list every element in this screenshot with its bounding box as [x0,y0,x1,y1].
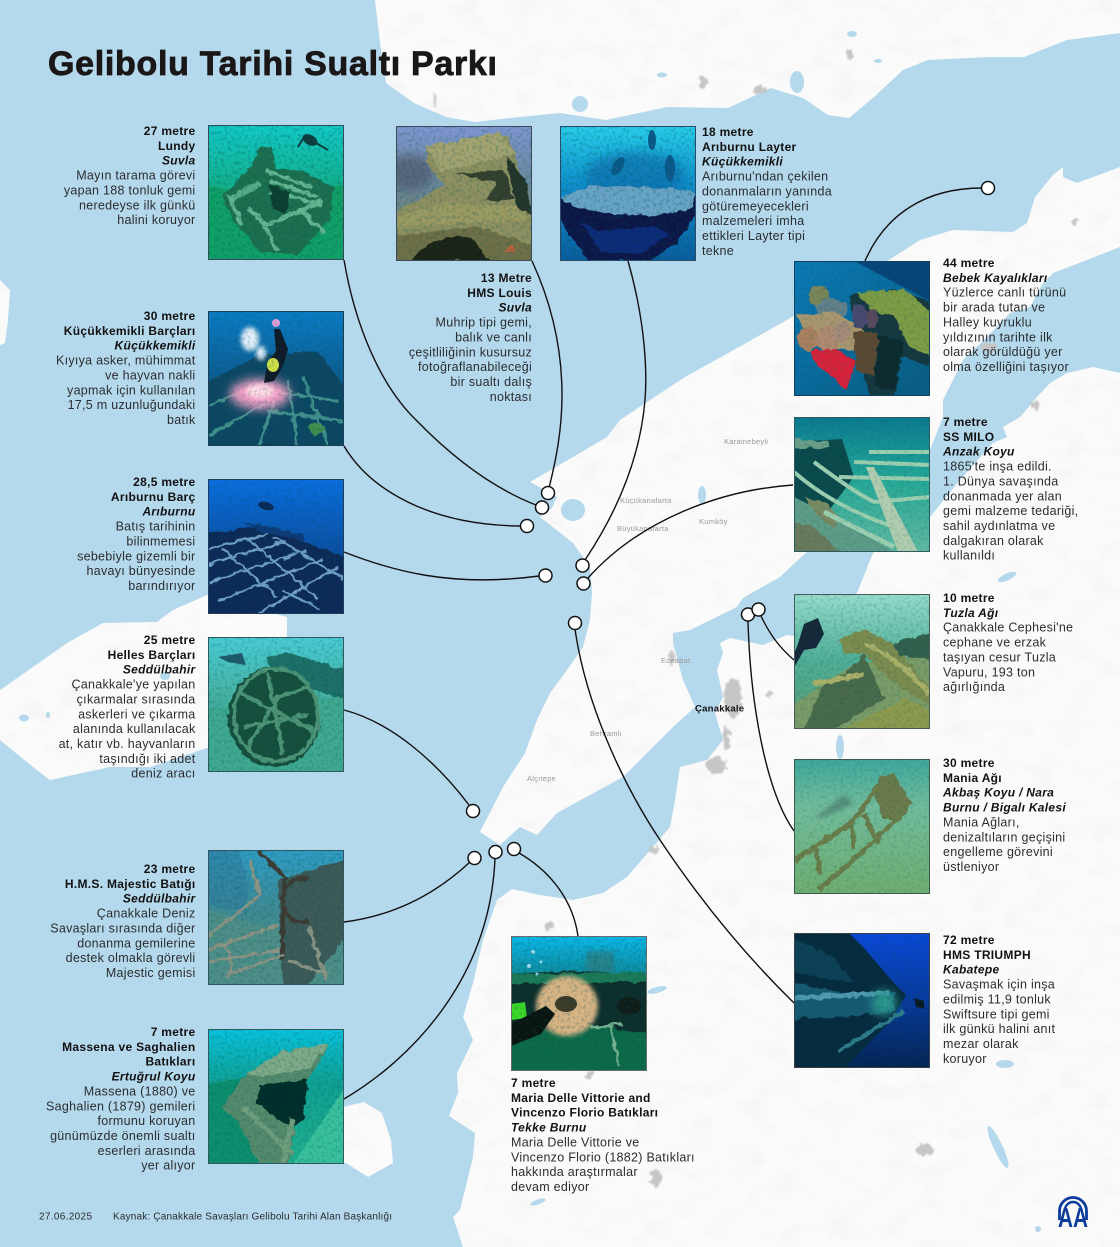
caption: Helles Barçları: 25 metre [144,633,196,647]
caption: Bebek Kayalıkları: Yüzlerce canlı türünü [943,286,1066,300]
photo: Lundy wreck [208,125,344,260]
caption: Arıburnu Barç: sebebiyle gizemli bir [77,549,196,563]
caption: Massena ve Saghalien: formunu koruyan [98,1114,196,1128]
caption: Küçükkemikli Barçları: ve hayvan nakli [105,368,196,382]
caption: Tuzla Ağı: cephane ve erzak [943,636,1047,650]
caption: Lundy: Suvla [162,154,196,168]
map place labels: Karainebeyli [724,437,768,446]
connector lines [344,188,982,1099]
caption: Helles Barçları: çıkarmalar sırasında [77,692,196,706]
caption: HMS Triumph: mezar olarak [943,1037,1019,1051]
caption: H.M.S. Majestic: Çanakkale Deniz [97,907,196,921]
caption: H.M.S. Majestic: 23 metre [144,862,196,876]
map place labels: Küçükanafarta [620,496,672,505]
caption: Mania Ağı: Burnu / Bigalı Kalesi [943,801,1066,815]
caption: Maria Delle Vittorie: hakkında araştırmalar [511,1165,638,1179]
caption: Arıburnu Barç: havayı bünyesinde [86,564,196,578]
map place labels: Kumköy [699,517,728,526]
caption: Lundy: Mayın tarama görevi [76,169,196,183]
caption: Arıburnu Layter: malzemeleri imha [702,214,804,228]
caption: Lundy: 27 metre [144,124,196,138]
location markers [466,182,994,864]
caption: Maria Delle Vittorie: Maria Delle Vittorie ve [511,1135,639,1149]
caption: Tuzla Ağı: Çanakkale Cephesi'ne [943,621,1073,635]
caption: Arıburnu Layter: Arıburnu'ndan çekilen [702,170,828,184]
footer source: Kaynak: Çanakkale Savaşları Gelibolu Tarihi Alan Başkanlığı [113,1212,392,1222]
caption: HMS Triumph: Kabatepe [943,963,999,977]
caption: HMS Triumph: ilk günkü halini anıt [943,1022,1055,1036]
caption: Lundy: Lundy [158,139,196,153]
caption: Arıburnu Layter: donanmaların yanında [702,184,832,198]
caption: SS MILO: 1. Dünya savaşında [943,474,1059,488]
caption: Küçükkemikli Barçları: Küçükkemikli Barçları [64,324,196,338]
photo: Küçükkemikli wreck [208,311,344,446]
caption: HMS Louis: fotoğraflanabileceği [418,360,532,374]
caption: Küçükkemikli Barçları: yapmak için kullanılan [67,383,196,397]
caption: HMS Triumph: Savaşmak için inşa [943,978,1055,992]
caption: Bebek Kayalıkları: 44 metre [943,256,995,270]
caption: Bebek Kayalıkları: olarak görüldüğü yer [943,345,1063,359]
caption: Mania Ağı: Mania Ağı [943,771,1002,785]
panel: Bebek Kayalıkları [794,256,1069,396]
caption: Helles Barçları: askerleri ve çıkarma [78,707,196,721]
caption: H.M.S. Majestic: H.M.S. Majestic Batığı [65,877,196,891]
caption: Tuzla Ağı: taşıyan cesur Tuzla [943,650,1056,664]
caption: HMS Louis: bir sualtı dalış [450,375,532,389]
photo: Helles wreck [208,637,344,772]
caption: Mania Ağı: 30 metre [943,756,995,770]
caption: Arıburnu Barç: 28,5 metre [133,475,196,489]
caption: HMS Louis: noktası [490,390,532,404]
caption: SS MILO: kullanıldı [943,549,995,563]
map place labels: Çanakkale [695,704,744,714]
caption: Arıburnu Layter: tekne [702,244,734,258]
footer date: 27.06.2025 [39,1212,92,1222]
caption: Tuzla Ağı: Vapuru, 193 ton [943,665,1035,679]
panel: Massena ve Saghalien [46,1025,344,1173]
caption: HMS Triumph: Swiftsure tipi gemi [943,1007,1050,1021]
caption: SS MILO: sahil aydınlatma ve [943,519,1055,533]
caption: Maria Delle Vittorie: Vincenzo Florio (1882) Batıkları [511,1150,695,1164]
caption: Küçükkemikli Barçları: Küçükkemikli [115,339,196,353]
caption: Helles Barçları: taşındığı iki adet [99,752,196,766]
caption: H.M.S. Majestic: Majestic gemisi [106,966,196,980]
panel: Arıburnu Barç [77,475,344,614]
caption: Helles Barçları: Helles Barçları [108,648,196,662]
photo: Arıburnu Layter wreck [560,126,696,261]
caption: Maria Delle Vittorie: devam ediyor [511,1180,589,1194]
photo: Majestic wreck [208,850,344,985]
caption: Arıburnu Barç: bilinmemesi [126,534,196,548]
caption: H.M.S. Majestic: Seddülbahir [123,892,197,906]
panel: SS MILO [794,415,1078,563]
panel: H.M.S. Majestic [50,850,344,985]
title: Gelibolu Tarihi Sualtı Parkı [48,45,497,83]
photo: Arıburnu Barç wreck [208,479,344,614]
panel: Lundy [64,124,344,260]
caption: Arıburnu Layter: 18 metre [702,125,754,139]
caption: HMS Louis: 13 Metre [481,271,532,285]
caption: Helles Barçları: Çanakkale'ye yapılan [71,678,196,692]
photo: SS MILO wreck [794,417,930,552]
caption: Arıburnu Layter: ettikleri Layter tipi [702,229,805,243]
caption: H.M.S. Majestic: destek olmakla görevli [66,951,196,965]
photo: Mania net [794,759,930,894]
caption: Massena ve Saghalien: Massena ve Saghalien [62,1040,196,1054]
caption: Mania Ağı: denizaltıların geçişini [943,830,1065,844]
caption: Küçükkemikli Barçları: 17,5 m uzunluğundaki [68,398,196,412]
caption: Bebek Kayalıkları: Bebek Kayalıkları [943,271,1048,285]
caption: Maria Delle Vittorie: Vincenzo Florio Batıkları [511,1106,658,1120]
panel: Arıburnu Layter [560,125,832,261]
caption: Bebek Kayalıkları: yıldızının tarihte ilk [943,330,1053,344]
caption: Mania Ağı: üstleniyor [943,860,999,874]
caption: Bebek Kayalıkları: olma özelliğini taşıyor [943,360,1069,374]
caption: HMS Louis: Muhrip tipi gemi, [436,316,532,330]
caption: HMS Louis: HMS Louis [467,286,532,300]
caption: Massena ve Saghalien: eserleri arasında [98,1144,196,1158]
caption: Küçükkemikli Barçları: batık [167,413,196,427]
caption: Tuzla Ağı: Tuzla Ağı [943,606,999,620]
panel: HMS Louis [386,126,532,404]
caption: Massena ve Saghalien: Saghalien (1879) gemileri [46,1099,196,1113]
caption: Massena ve Saghalien: Ertuğrul Koyu [112,1070,196,1084]
photo: Bebek reef [794,261,930,396]
photo: Massena wreck [208,1029,344,1164]
caption: Helles Barçları: Seddülbahir [123,663,197,677]
caption: Arıburnu Layter: Küçükkemikli [702,155,783,169]
caption: Arıburnu Barç: Arıburnu [141,505,196,519]
caption: SS MILO: gemi malzeme tedariği, [943,504,1078,518]
caption: SS MILO: dalgakıran olarak [943,534,1044,548]
caption: Tuzla Ağı: 10 metre [943,591,995,605]
panel: HMS Triumph [794,933,1055,1068]
photo: HMS Triumph wreck [794,933,930,1068]
caption: Mania Ağı: Akbaş Koyu / Nara [942,786,1054,800]
caption: SS MILO: Anzak Koyu [942,445,1015,459]
panel: Küçükkemikli Barçları [56,309,344,446]
caption: Lundy: halini koruyor [117,213,196,227]
caption: HMS Triumph: koruyor [943,1052,987,1066]
caption: SS MILO: SS MILO [943,430,994,444]
caption: Arıburnu Layter: götüremeyecekleri [702,199,809,213]
panel: Mania Ağı [794,756,1066,894]
icon: AA logo [1058,1198,1088,1233]
caption: Arıburnu Barç: Arıburnu Barç [111,490,196,504]
caption: Bebek Kayalıkları: bir arada tutan ve [943,301,1045,315]
caption: Arıburnu Barç: Batış tarihinin [116,520,196,534]
panel: Helles Barçları [59,633,344,781]
caption: Küçükkemikli Barçları: 30 metre [144,309,196,323]
caption: Helles Barçları: alanında kullanılacak [73,722,196,736]
caption: Helles Barçları: at, katır vb. hayvanların [59,737,196,751]
photo: HMS Louis wreck [396,126,532,261]
caption: H.M.S. Majestic: donanma gemilerine [77,936,196,950]
caption: Bebek Kayalıkları: Halley kuyruklu [943,315,1032,329]
icon: AA logo: AA [1058,1202,1088,1233]
caption: HMS Louis: çeşitliliğinin kusursuz [409,345,532,359]
caption: H.M.S. Majestic: Savaşları sırasında diğer [50,921,196,935]
caption: Massena ve Saghalien: günümüzde önemli sualtı [50,1129,196,1143]
caption: HMS Triumph: 72 metre [943,933,995,947]
caption: SS MILO: 1865'te inşa edildi. [943,460,1052,474]
caption: Mania Ağı: Mania Ağları, [943,815,1020,829]
caption: HMS Triumph: edilmiş 11,9 tonluk [943,992,1051,1006]
caption: Lundy: yapan 188 tonluk gemi [64,183,196,197]
map place labels [527,437,768,783]
caption: Maria Delle Vittorie: Maria Delle Vittorie and [511,1091,651,1105]
photo: Maria Delle Vittorie wreck [511,936,647,1071]
caption: HMS Triumph: HMS TRIUMPH [943,948,1031,962]
map place labels: Alçıtepe [527,774,556,783]
caption: Helles Barçları: deniz aracı [131,767,196,781]
caption: HMS Louis: balık ve canlı [455,330,532,344]
caption: Massena ve Saghalien: 7 metre [151,1025,196,1039]
caption: SS MILO: donanmada yer alan [943,489,1062,503]
panel: Tuzla Ağı [794,591,1073,729]
caption: Küçükkemikli Barçları: Kıyıya asker, mühimmat [56,354,196,368]
map place labels: Büyükanafarta [617,524,669,533]
caption: SS MILO: 7 metre [943,415,988,429]
map place labels: Behramlı [590,729,622,738]
caption: Massena ve Saghalien: Massena (1880) ve [84,1084,196,1098]
caption: Mania Ağı: engelleme görevini [943,845,1053,859]
caption: HMS Louis: Suvla [498,301,532,315]
caption: Massena ve Saghalien: yer alıyor [141,1159,196,1173]
photo: Tuzla wreck [794,594,930,729]
caption: Lundy: neredeyse ilk günkü [79,198,196,212]
caption: Arıburnu Layter: Arıburnu Layter [702,140,797,154]
panel: Maria Delle Vittorie [511,936,695,1194]
map place labels: Eceabat [661,656,691,665]
caption: Maria Delle Vittorie: Tekke Burnu [511,1121,587,1135]
caption: Tuzla Ağı: ağırlığında [943,680,1005,694]
caption: Arıburnu Barç: barındırıyor [128,579,196,593]
caption: Massena ve Saghalien: Batıkları [145,1055,196,1069]
caption: Maria Delle Vittorie: 7 metre [511,1076,556,1090]
